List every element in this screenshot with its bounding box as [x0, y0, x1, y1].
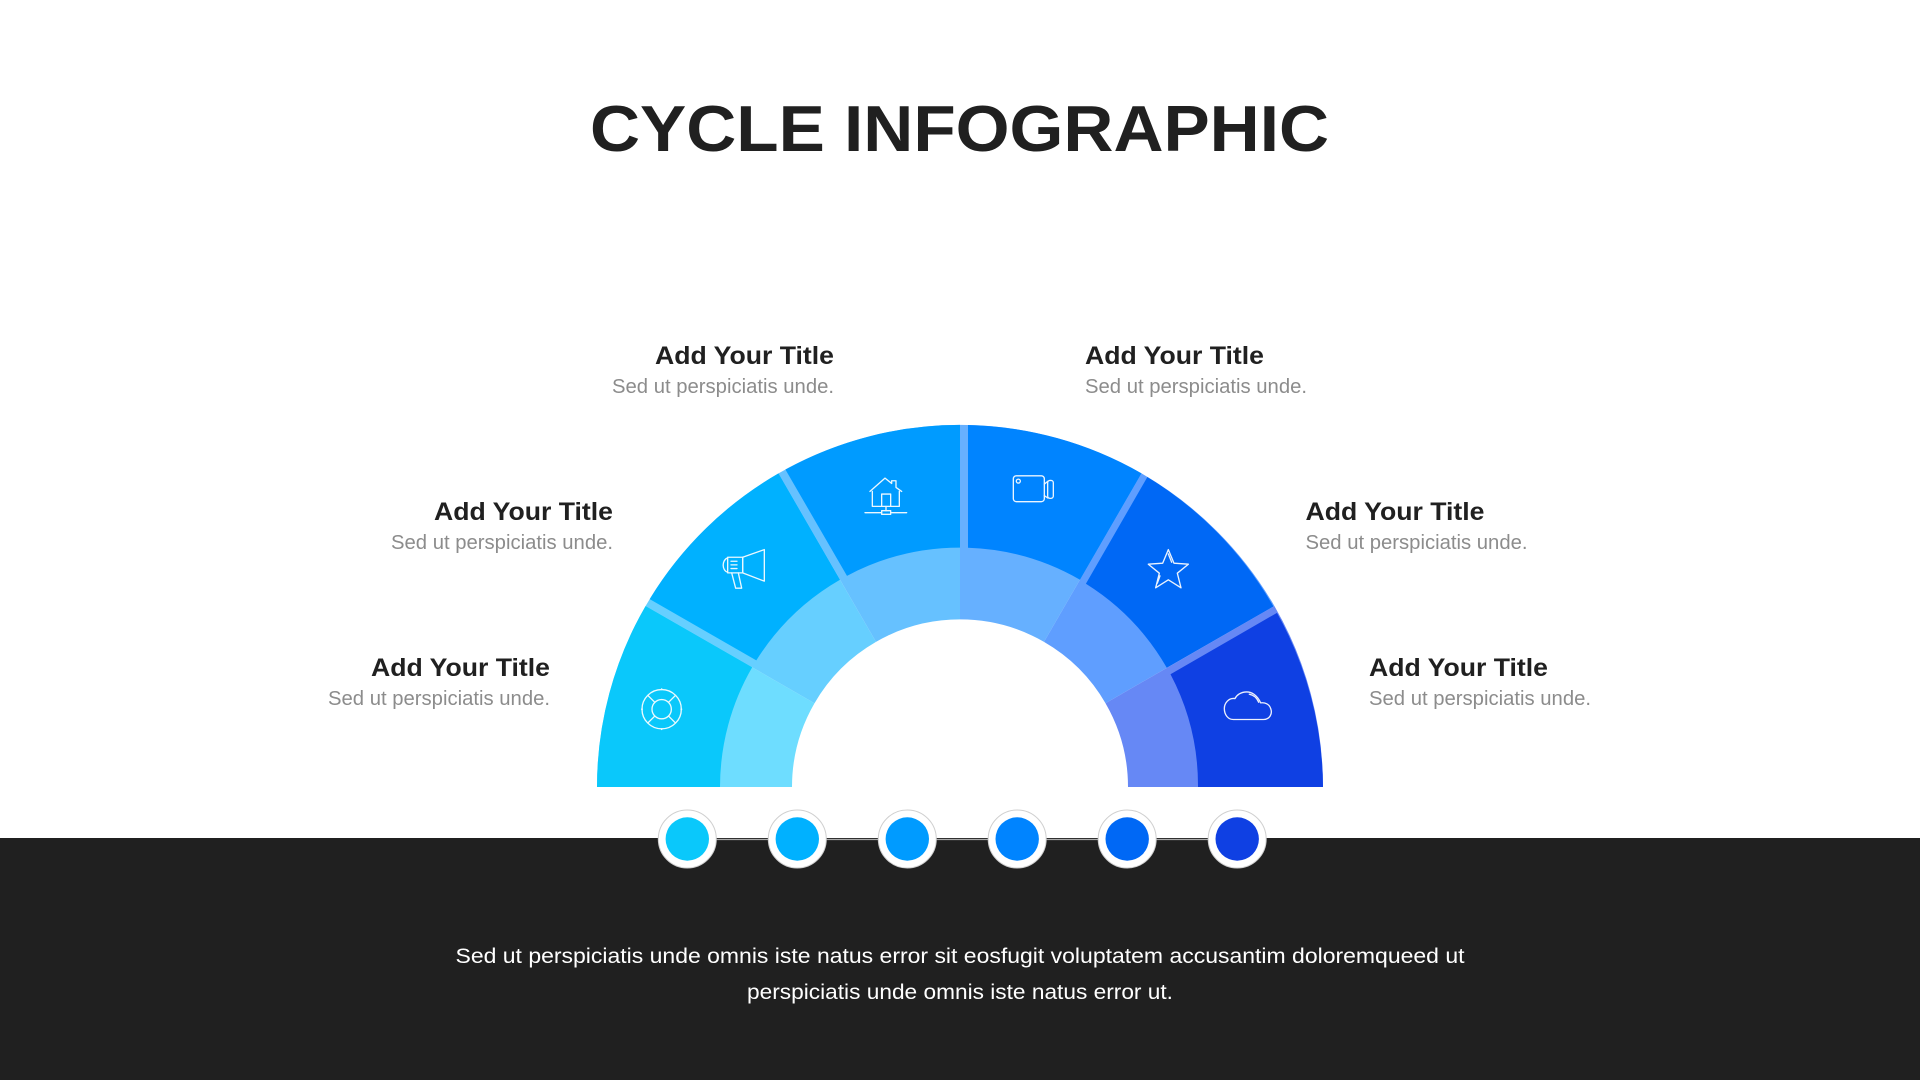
dot 3 [878, 810, 936, 868]
segment 2: dark band [650, 473, 840, 660]
icon: house [865, 478, 907, 514]
segment 6: light wedge [1106, 606, 1323, 787]
label: bottom right: Add Your Title [1369, 654, 1548, 682]
segment 4: dark band [968, 425, 1142, 580]
label: bottom left: Sed ut perspiciatis unde. [328, 688, 550, 710]
label: middle right: Add Your Title [1306, 498, 1485, 526]
label: top right: Add Your Title [1085, 342, 1264, 370]
label: middle left: Add Your Title [434, 498, 613, 526]
title: CYCLE INFOGRAPHIC [590, 92, 1329, 165]
segment 5: dark band [1086, 477, 1273, 668]
segment 4: light wedge [960, 425, 1142, 642]
footer text [456, 945, 1465, 1004]
segment 2: light wedge [646, 473, 876, 703]
dot 5 [1098, 810, 1156, 868]
icon: cloud [1224, 692, 1271, 719]
label: bottom right: Sed ut perspiciatis unde. [1369, 688, 1591, 710]
segment 3: light wedge [778, 425, 960, 642]
label: bottom left [328, 654, 550, 710]
label: top right [1085, 342, 1307, 398]
label: middle left: Sed ut perspiciatis unde. [391, 532, 613, 554]
label: middle right: Sed ut perspiciatis unde. [1306, 532, 1528, 554]
icon: star [1148, 550, 1188, 588]
segment 3: dark band [785, 425, 960, 576]
connector line [687, 838, 1237, 840]
dot 4 [988, 810, 1046, 868]
icon: megaphone [723, 550, 764, 588]
label: top right: Sed ut perspiciatis unde. [1085, 376, 1307, 398]
label: middle right [1306, 498, 1528, 554]
dot 1 [658, 810, 716, 868]
label: top left: Sed ut perspiciatis unde. [612, 376, 834, 398]
segment 5: light wedge [1044, 473, 1274, 703]
bottom dark band [0, 838, 1920, 1080]
segment 1: dark band [597, 606, 752, 787]
footer text: perspiciatis unde omnis iste natus error ut. [747, 981, 1173, 1004]
label: bottom right [1369, 654, 1591, 710]
segment 6: dark band [1170, 613, 1323, 787]
dot 2 [768, 810, 826, 868]
label: middle left [391, 498, 613, 554]
dot 6 [1208, 810, 1266, 868]
label: top left: Add Your Title [655, 342, 834, 370]
icon: video camera [1013, 476, 1053, 502]
timeline with six dots [658, 810, 1266, 868]
icon: lifebuoy [642, 689, 682, 729]
semicircle cycle chart [597, 425, 1323, 787]
label: bottom left: Add Your Title [371, 654, 550, 682]
segment 1: light wedge [597, 606, 814, 787]
label: top left [612, 342, 834, 398]
footer text: Sed ut perspiciatis unde omnis iste natus error sit eosfugit voluptatem accusantim doloremqueed ut [456, 945, 1465, 968]
